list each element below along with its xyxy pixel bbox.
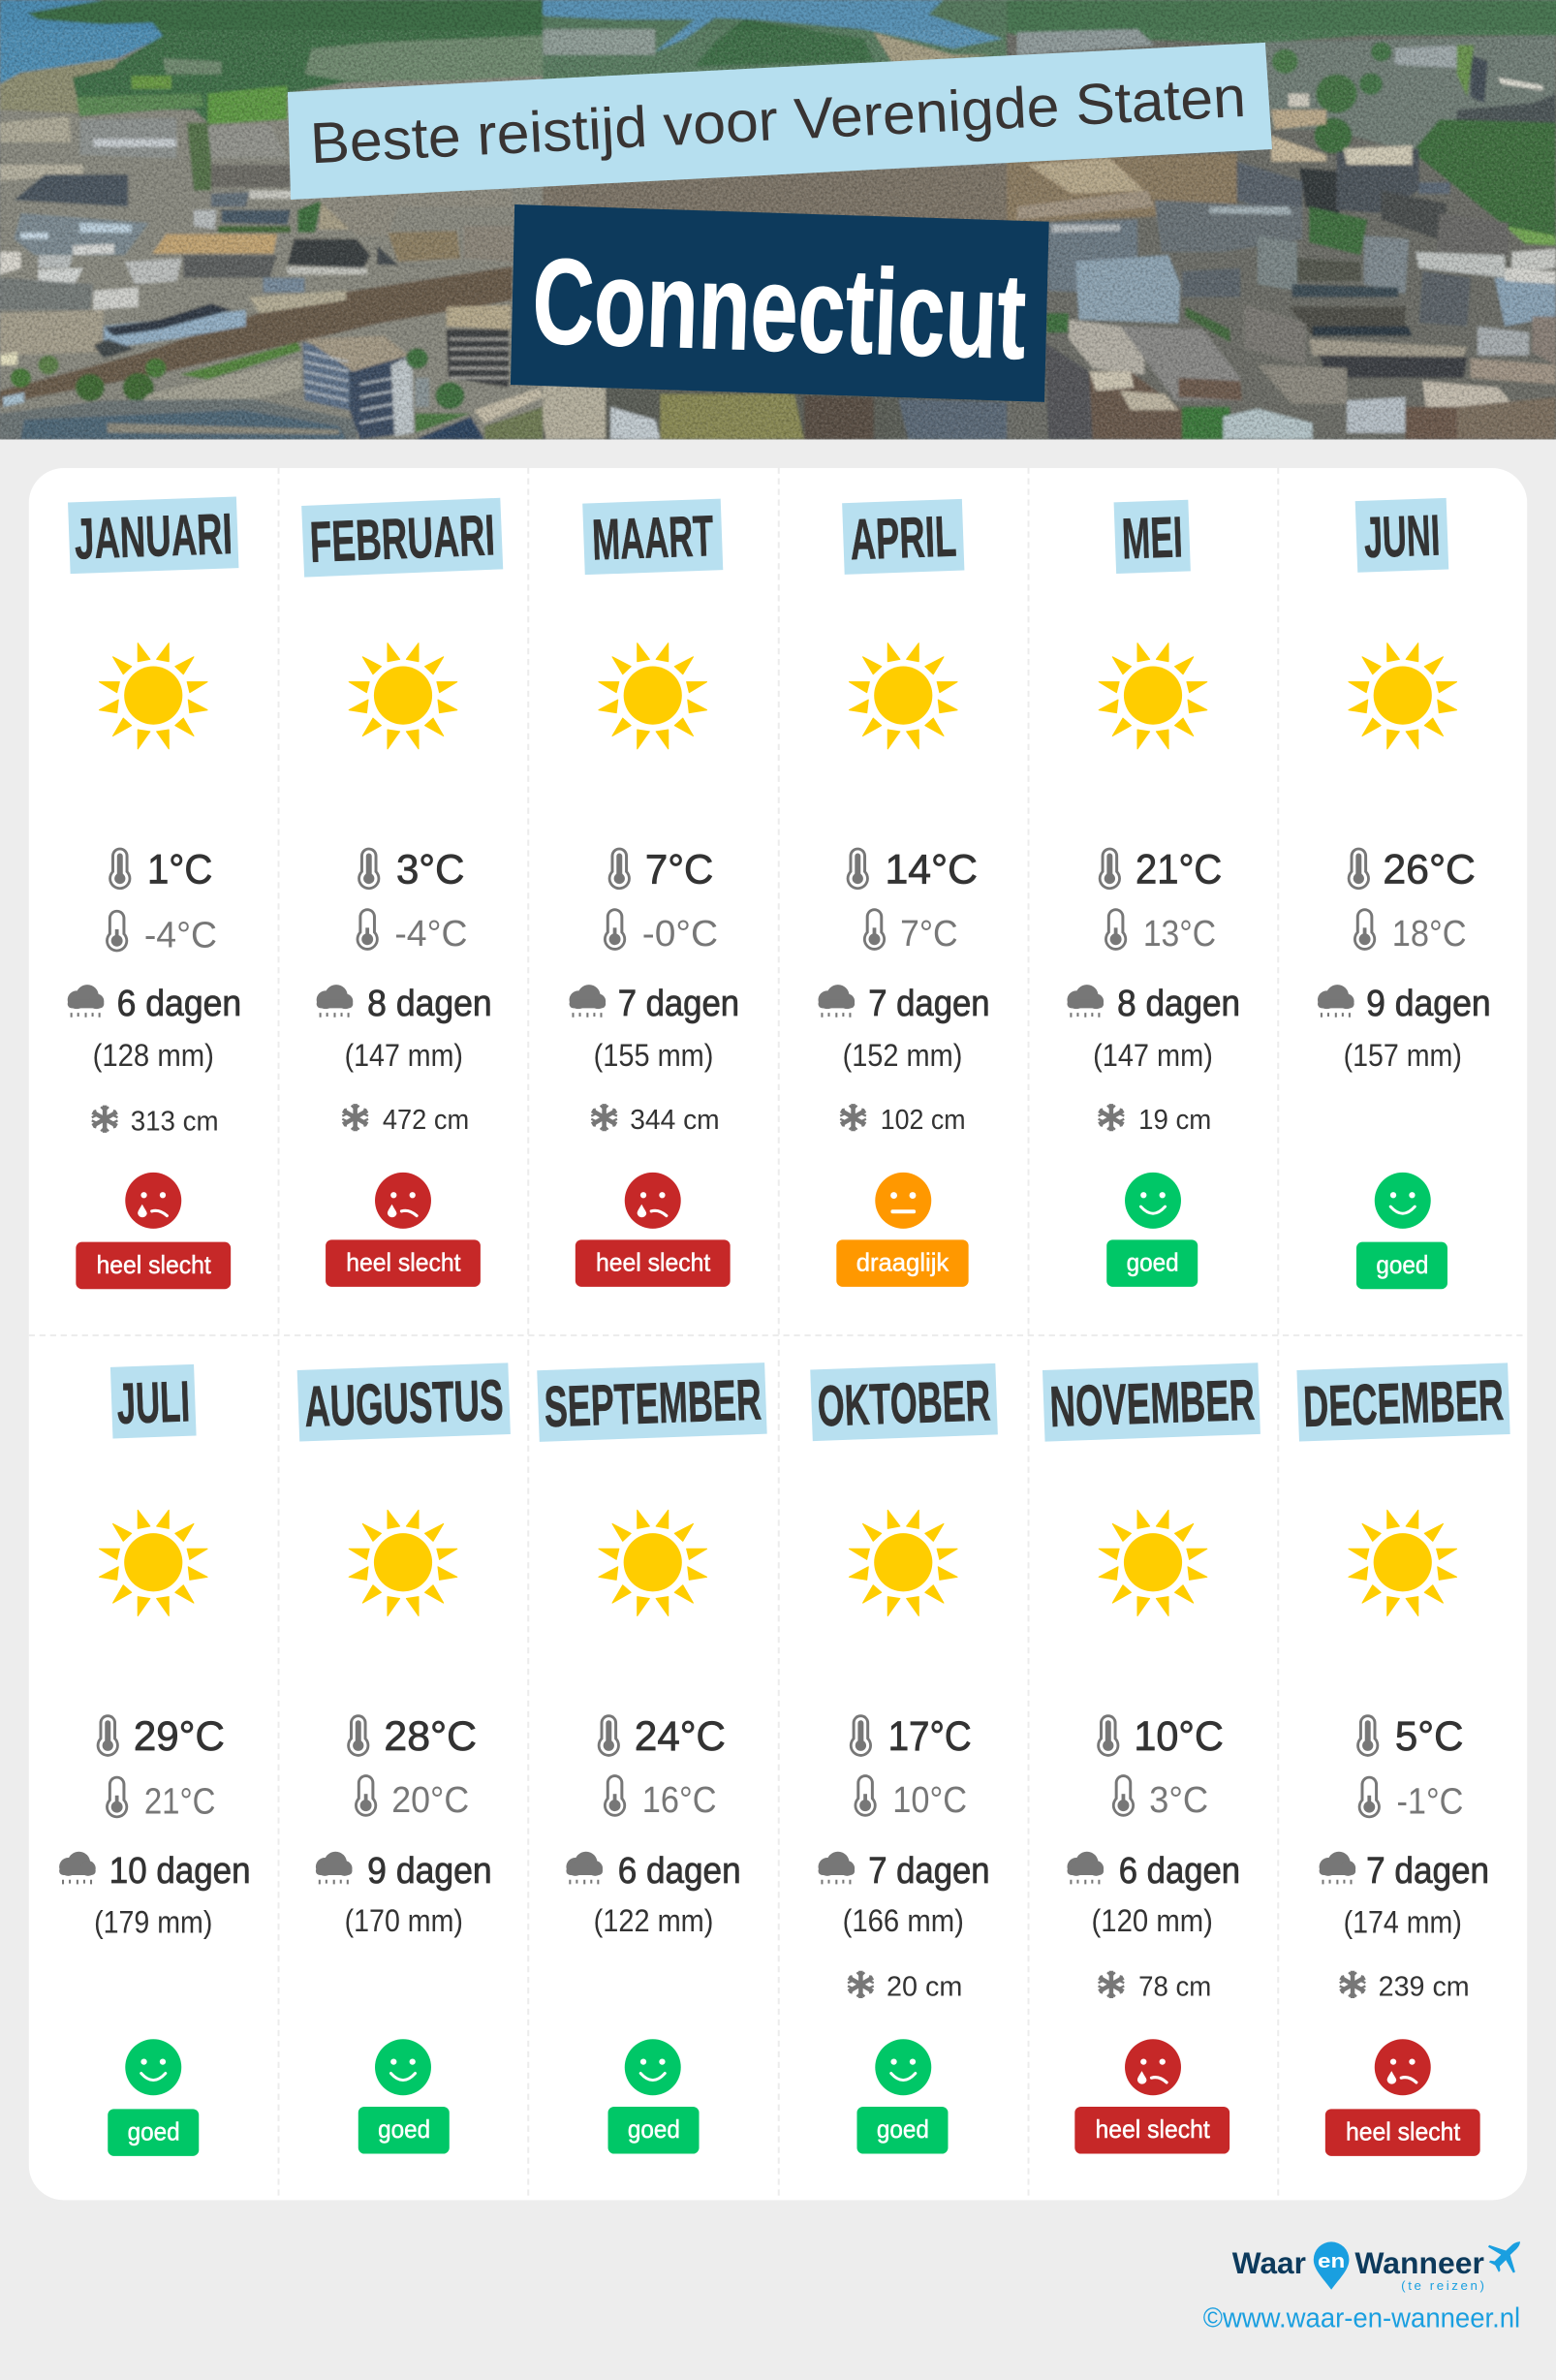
icon: location pin [1314,2241,1349,2290]
month label: JANUARI [68,496,238,574]
low temperature: -1°C [1396,1780,1463,1821]
rating badge: goed [128,2118,180,2145]
low temperature: -4°C [394,913,468,954]
snowfall [840,1104,966,1136]
smiley: very bad [1125,2039,1181,2095]
icon: sun [1099,1510,1207,1615]
high temperature [850,1713,972,1759]
high temperature: 1°C [147,846,212,892]
rain days [819,1850,990,1891]
icon: sun [99,1510,207,1615]
white calendar card [29,468,1527,2200]
high temperature: 7°C [645,846,713,892]
low temperature: 16°C [642,1779,717,1820]
rating badge [358,2107,450,2154]
title banner: Beste reistijd voor Verenigde Staten: Beste reistijd voor Verenigde Staten [308,64,1247,175]
rainfall: (122 mm) [594,1903,713,1938]
rating badge: heel slecht [346,1249,461,1276]
low temperature [106,910,217,955]
low temperature: 7°C [900,913,958,954]
smiley: good [125,2039,181,2095]
month label: JULI: JULI [116,1368,191,1436]
smiley: acceptable [875,1173,931,1229]
snowfall [1099,1104,1211,1136]
low temperature: 10°C [892,1779,967,1820]
low temperature [854,1774,967,1820]
icon: sun [599,1510,707,1615]
month label: AUGUSTUS: AUGUSTUS [303,1367,505,1439]
rainfall: (120 mm) [1092,1903,1213,1938]
snowfall: 472 cm [383,1105,469,1136]
rain days [570,983,739,1023]
rain days: 9 dagen [367,1850,492,1891]
panel: november [1043,1362,1260,2154]
smiley: good [375,2039,431,2095]
icon: sun [1349,643,1457,749]
high temperature: 3°C [396,846,464,892]
rain days [1318,983,1491,1023]
rain days: 6 dagen [618,1850,741,1891]
low temperature: 3°C [1149,1779,1208,1820]
low temperature [1354,908,1467,954]
icon: sun [599,643,707,749]
high temperature [358,846,464,892]
smiley: good [1125,1173,1181,1229]
rating badge [108,2109,199,2156]
rain days [316,1850,492,1891]
high temperature: 17°C [888,1713,972,1759]
low temperature [357,908,468,954]
rating badge: draaglijk [856,1249,949,1276]
high temperature: 10°C [1134,1713,1224,1759]
rain days [68,983,241,1023]
panel: september [537,1362,767,2154]
rain days [1320,1850,1489,1891]
rating badge [1325,2109,1480,2156]
month label: NOVEMBER [1043,1362,1260,1442]
rain days: 10 dagen [109,1850,251,1891]
rating badge: heel slecht [96,1252,211,1279]
rating badge [576,1239,731,1287]
rainfall: (157 mm) [1344,1038,1462,1073]
low temperature: 13°C [1143,913,1216,954]
low temperature [604,1774,717,1820]
snowfall [92,1106,219,1137]
high temperature [1097,1713,1224,1759]
high temperature: 29°C [134,1713,225,1759]
month label: APRIL [842,499,964,575]
logo: Waar en Wanneer: Waar [1232,2246,1306,2280]
high temperature: 26°C [1383,846,1476,892]
rain days [1067,983,1240,1023]
icon: sun [349,643,457,749]
icon: sun [1349,1510,1457,1615]
rainfall: (128 mm) [93,1038,214,1073]
high temperature [109,846,212,892]
low temperature: -4°C [144,915,217,955]
rain days: 8 dagen [367,983,492,1023]
logo: Waar en Wanneer [1232,2241,1520,2293]
rating badge: goed [628,2116,680,2144]
icon: airplane [1488,2241,1520,2273]
high temperature: 14°C [885,846,978,892]
month label: SEPTEMBER [537,1362,767,1442]
panel: juli [59,1364,251,2156]
month label: FEBRUARI: FEBRUARI [308,502,496,575]
rating badge: goed [1376,1252,1428,1279]
snowfall: 20 cm [887,1971,962,2002]
panel: oktober [810,1363,998,2154]
icon: sun [849,643,957,749]
icon: sun [1099,643,1207,749]
title banner: Connecticut: Connecticut [531,233,1028,385]
rain days: 6 dagen [117,983,241,1023]
low temperature [863,908,958,954]
title banner: Beste reistijd voor Verenigde Staten [288,43,1272,200]
rating badge [1106,1239,1198,1287]
low temperature [604,908,718,954]
rainfall: (147 mm) [1093,1038,1213,1073]
smiley: good [1375,1173,1431,1229]
month label: OKTOBER [810,1363,998,1441]
rain days [1067,1850,1240,1891]
month label: JANUARI: JANUARI [74,501,233,572]
panel: februari [301,498,503,1287]
panel: januari [68,496,241,1289]
rain days: 7 dagen [868,983,990,1023]
panel: mei [1067,500,1240,1287]
high temperature [608,846,713,892]
low temperature [355,1774,469,1820]
rating badge [856,2107,948,2154]
high temperature [847,846,978,892]
month label: OKTOBER: OKTOBER [817,1367,992,1439]
smiley: good [625,2039,681,2095]
high temperature: 28°C [384,1713,477,1759]
website credit: ©www.waar-en-wanneer.nl [1203,2303,1520,2334]
rating badge: goed [1127,1249,1179,1276]
month label: NOVEMBER: NOVEMBER [1048,1367,1256,1439]
month label: MEI [1114,500,1191,574]
high temperature: 24°C [635,1713,726,1759]
low temperature [1358,1776,1463,1821]
smiley: very bad [375,1173,431,1229]
rating badge [1074,2107,1229,2154]
icon: sun [99,643,207,749]
snowfall [591,1104,720,1136]
rain days: 7 dagen [868,1850,990,1891]
snowfall [848,1971,962,2002]
rainfall: (152 mm) [843,1038,962,1073]
rain days: 8 dagen [1117,983,1240,1023]
rain days [566,1850,741,1891]
snowfall: 102 cm [881,1105,966,1136]
low temperature: 18°C [1392,913,1467,954]
month label: FEBRUARI [301,498,503,578]
low temperature [1105,908,1216,954]
snowfall: 313 cm [131,1106,219,1137]
low temperature: 21°C [144,1780,215,1821]
panel: augustus [297,1362,511,2154]
rating badge: goed [378,2116,430,2144]
icon: sun [849,1510,957,1615]
low temperature: -0°C [642,913,718,954]
rain days [819,983,990,1023]
month label: MEI: MEI [1121,504,1184,571]
snowfall [1340,1971,1470,2002]
rating badge: heel slecht [596,1249,710,1276]
smiley: very bad [125,1173,181,1229]
month label: MAART: MAART [591,503,715,573]
rain days [317,983,492,1023]
header photo: aerial view of Connecticut city [0,0,1556,440]
low temperature [1112,1774,1208,1820]
snowfall [342,1104,469,1136]
icon: location pin: en [1318,2251,1345,2272]
rain days: 7 dagen [1366,1850,1489,1891]
title banner: Connecticut [511,204,1049,402]
rain days: 9 dagen [1366,983,1491,1023]
logo: Waar en Wanneer: (te reizen) [1401,2278,1484,2293]
snowfall [1099,1971,1211,2002]
rain days [59,1850,251,1891]
month label: JUNI: JUNI [1363,502,1441,570]
smiley: very bad [625,1173,681,1229]
rainfall: (166 mm) [843,1903,964,1938]
rainfall: (170 mm) [345,1903,463,1938]
icon: sun [349,1510,457,1615]
month label: AUGUSTUS [297,1362,511,1442]
snowfall: 344 cm [630,1105,720,1136]
month label: MAART [582,499,723,575]
high temperature: 21°C [1136,846,1222,892]
rating badge [76,1242,231,1289]
month label: SEPTEMBER: SEPTEMBER [544,1367,762,1439]
rating badge [608,2107,700,2154]
panel: december [1296,1362,1510,2156]
rating badge: goed [877,2116,929,2144]
rating badge [1356,1242,1447,1289]
high temperature [1356,1713,1463,1759]
rating badge [836,1239,969,1287]
month label: APRIL: APRIL [849,503,957,572]
rainfall: (147 mm) [345,1038,463,1073]
logo: Waar en Wanneer: Wanneer [1354,2246,1484,2280]
rainfall: (155 mm) [594,1038,713,1073]
rain days: 6 dagen [1119,1850,1240,1891]
high temperature [1099,846,1222,892]
snowfall: 19 cm [1138,1105,1211,1136]
snowfall: 239 cm [1379,1971,1470,2002]
panel: juni [1318,498,1491,1289]
month label: JULI [110,1364,197,1438]
snowfall: 78 cm [1138,1971,1211,2002]
high temperature: 5°C [1395,1713,1463,1759]
rating badge: heel slecht [1346,2118,1460,2145]
rating badge: heel slecht [1095,2116,1210,2144]
rainfall: (174 mm) [1344,1905,1462,1940]
rating badge [326,1239,481,1287]
rainfall: (179 mm) [94,1905,212,1940]
low temperature: 20°C [391,1779,469,1820]
month label: JUNI [1355,498,1448,573]
smiley: very bad [1375,2039,1431,2095]
rain days: 7 dagen [618,983,739,1023]
smiley: good [875,2039,931,2095]
low temperature [106,1776,215,1821]
panel: maart [570,499,739,1287]
panel: april [819,499,990,1287]
